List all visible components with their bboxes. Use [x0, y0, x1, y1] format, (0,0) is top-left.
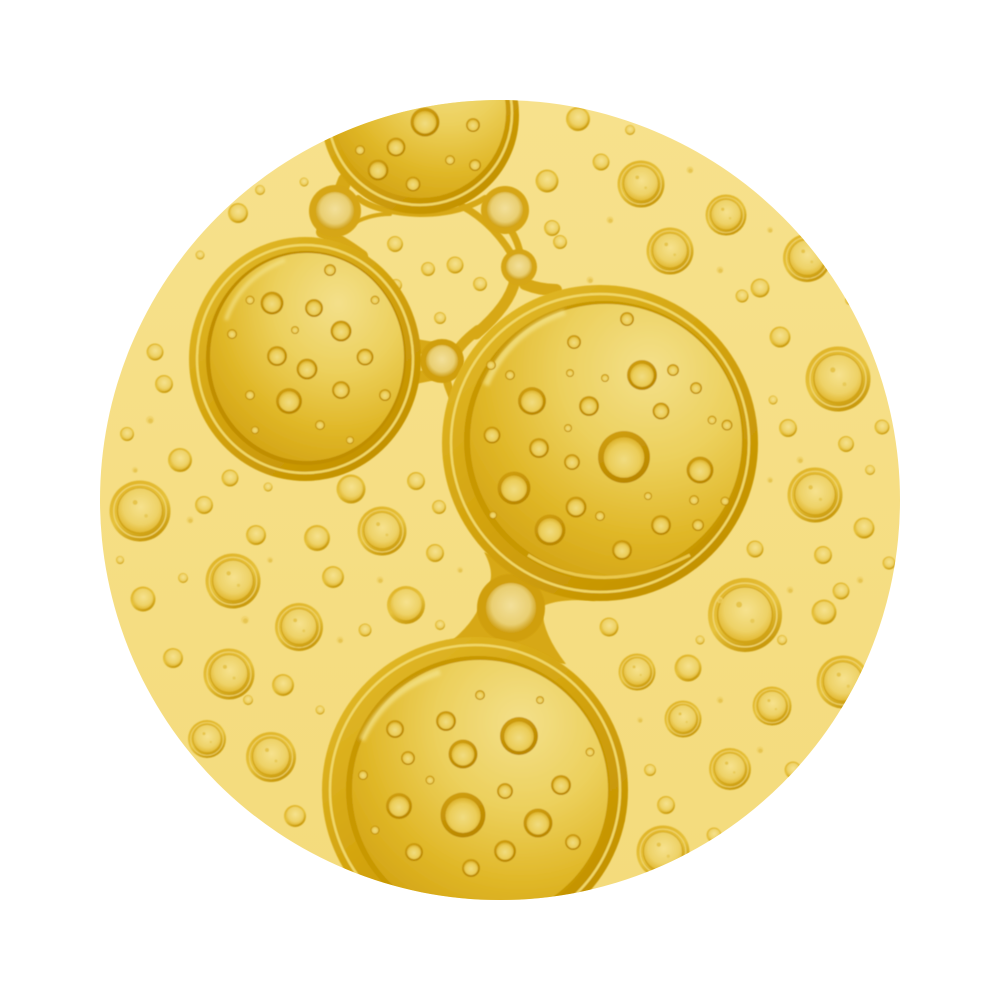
- oil disc: [100, 100, 900, 900]
- bridges joining the large bubbles: [322, 180, 596, 664]
- large bubble: top: [324, 100, 520, 214]
- medium and small surface droplets: [110, 107, 896, 878]
- large bubble: left: [189, 237, 421, 481]
- illustration: golden oil bubbles in a circle: [100, 100, 900, 900]
- connector droplet: upper right: [481, 186, 529, 234]
- connector droplet: lower: [477, 574, 545, 642]
- large bubble: bottom: [321, 638, 629, 900]
- connector droplet: upper left: [309, 185, 361, 237]
- connector droplet: centre: [420, 339, 464, 383]
- connector droplet: middle right: [501, 249, 537, 285]
- large bubble: centre right: [442, 285, 758, 601]
- disc background: [100, 100, 900, 900]
